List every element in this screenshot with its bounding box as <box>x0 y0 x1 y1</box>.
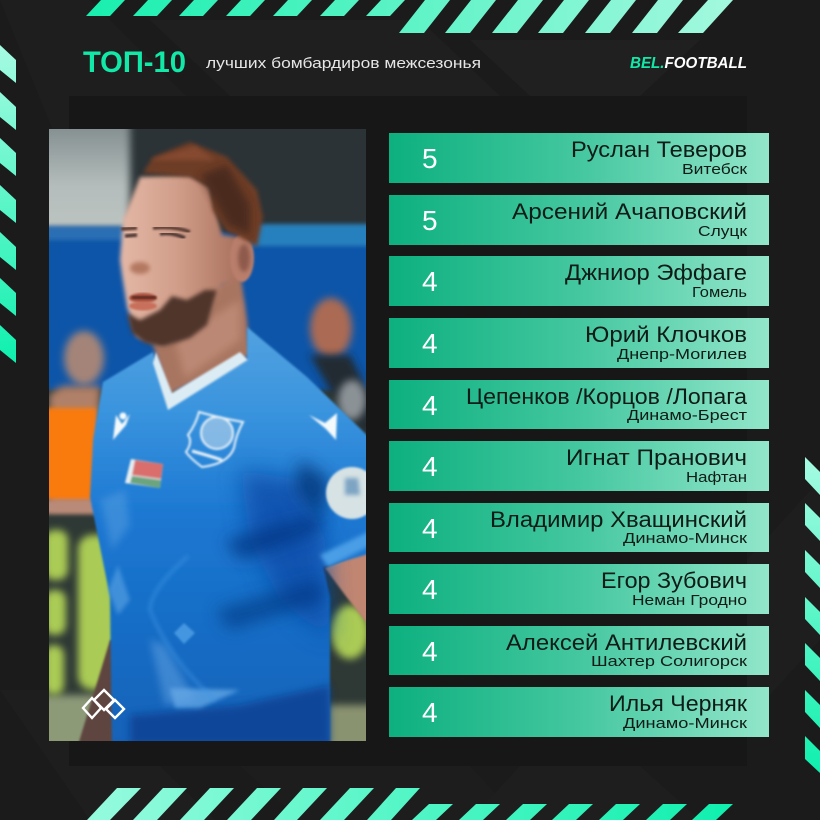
player photo <box>49 129 366 741</box>
row 3: Джниор Эффаге <box>565 260 747 285</box>
row 2: Арсений Ачаповский <box>512 199 747 224</box>
macron logos <box>113 412 337 440</box>
row 7: Динамо-Минск <box>623 531 748 547</box>
row 8: Егор Зубович <box>601 568 747 593</box>
row 4 <box>389 318 769 368</box>
row 4: Юрий Клочков <box>585 322 747 347</box>
subtitle: лучших бомбардиров межсезонья <box>206 55 481 72</box>
row 4: Днепр-Могилев <box>617 347 747 363</box>
ear <box>230 234 254 282</box>
watermark <box>83 690 124 718</box>
row 1: 5 <box>422 143 438 174</box>
row 7: Владимир Хващинский <box>490 507 747 532</box>
row 8: 4 <box>422 574 438 605</box>
logo: BEL.FOOTBALL: BEL.FOOTBALL <box>630 55 747 72</box>
nose shadow <box>130 262 150 274</box>
row 7: 4 <box>422 513 438 544</box>
top stripes <box>86 0 733 33</box>
row 8 <box>389 564 769 614</box>
row 1: Руслан Теверов <box>571 137 747 162</box>
arms <box>324 553 366 624</box>
flag <box>125 459 163 488</box>
right stripes <box>805 457 820 773</box>
row 5: 4 <box>422 390 438 421</box>
background figures <box>44 298 372 514</box>
row 5 <box>389 380 769 429</box>
row 9 <box>389 626 769 675</box>
eyes <box>125 234 185 238</box>
row 10: 4 <box>422 697 438 728</box>
row 2: Слуцк <box>698 224 748 240</box>
row 2: 5 <box>422 205 438 236</box>
row 6: Нафтан <box>686 470 747 486</box>
title: ТОП-10 <box>83 46 186 79</box>
lips <box>129 293 157 303</box>
bottom stripes <box>87 788 733 820</box>
row 6: 4 <box>422 451 438 482</box>
row 1 <box>389 133 769 183</box>
row 5: Цепенков /Корцов /Лопага <box>466 384 748 409</box>
sleeve patch <box>324 466 366 521</box>
jersey <box>90 327 372 745</box>
club badge <box>186 412 243 467</box>
row 4: 4 <box>422 328 438 359</box>
row 9: Алексей Антилевский <box>506 630 747 655</box>
jersey shading <box>100 460 372 745</box>
row 3: 4 <box>422 266 438 297</box>
row 7 <box>389 503 769 552</box>
neck <box>153 270 250 395</box>
row 1: Витебск <box>682 162 748 178</box>
row 10: Илья Черняк <box>609 691 747 716</box>
row 5: Динамо-Брест <box>627 408 747 424</box>
inner dark panel <box>69 96 747 766</box>
row 9: Шахтер Солигорск <box>591 654 748 670</box>
row 3: Гомель <box>692 285 747 301</box>
row 6 <box>389 441 769 491</box>
green blobs <box>44 530 369 695</box>
row 2 <box>389 195 769 245</box>
left stripes <box>0 45 16 363</box>
collar <box>153 352 248 410</box>
face and head <box>120 142 263 347</box>
beard <box>127 290 217 347</box>
row 8: Неман Гродно <box>632 593 747 609</box>
row 6: Игнат Пранович <box>566 445 747 470</box>
hair <box>143 142 263 247</box>
brows <box>121 228 190 232</box>
row 3 <box>389 256 769 306</box>
row 9: 4 <box>422 636 438 667</box>
row 10: Динамо-Минск <box>623 716 748 732</box>
row 10 <box>389 687 769 737</box>
